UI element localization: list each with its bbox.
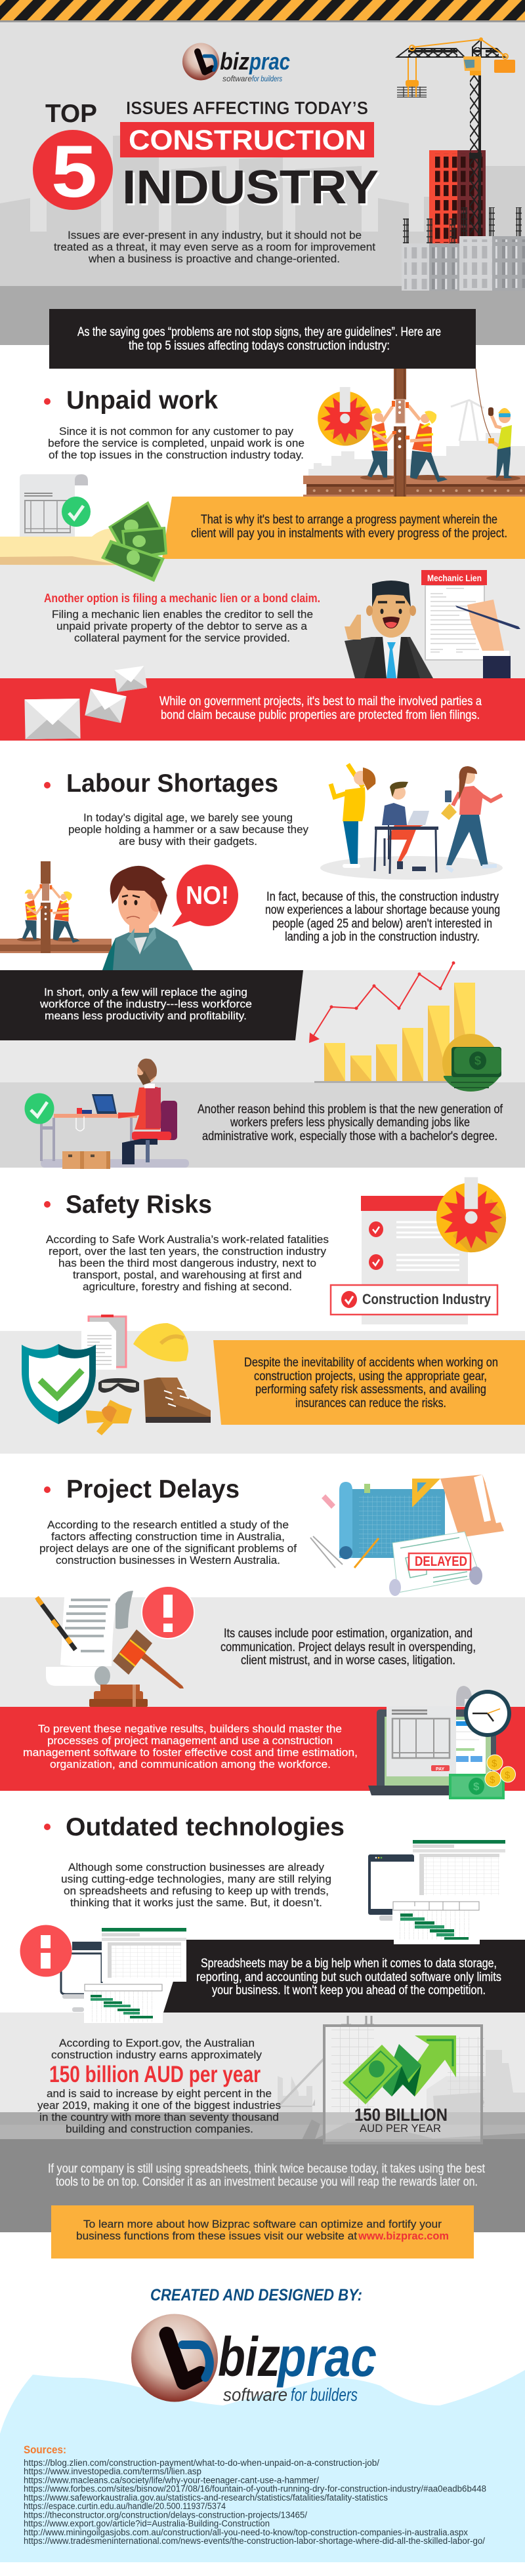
grey panel: causes — [0, 1597, 525, 1707]
panel: export stats background — [0, 2013, 525, 2232]
sources list: https://www.safeworkaustralia.gov.au/statistics-and-research/statistics/fatalities/fatality-statistics — [24, 2493, 388, 2503]
callout: 150 billion graphic: 150 BILLION — [354, 2105, 448, 2125]
header panel background — [0, 20, 525, 345]
chart: declining bar chart with money: $ — [474, 1054, 481, 1067]
logo: bizprac header: biz — [220, 48, 249, 75]
text: export.gov statistic — [37, 2037, 281, 2135]
text: labour shortages intro: people holding a hammer or a saw because they — [68, 824, 309, 836]
text: export.gov statistic: year 2019, making it one of the biggest industries — [37, 2100, 281, 2112]
text: export.gov statistic: building and construction companies. — [66, 2123, 253, 2135]
text: safety risks intro: transport, postal, and warehousing at first and — [73, 1269, 302, 1281]
red callout: bond claim — [0, 678, 525, 741]
sources list: https://www.forbes.com/sites/bisnow/2017/08/16/fountain-of-youth-running-dry-for-construction-industry/#aa0eadb6b448 — [24, 2484, 486, 2494]
intro paragraph: when a business is proactive and change-oriented. — [88, 253, 340, 265]
red callout: project management software: processes of project management and use a construction — [47, 1735, 333, 1747]
dark callout: spreadsheets limit business — [163, 1940, 525, 2013]
illustration: checklist with construction industry — [331, 1196, 497, 1324]
callout: 150 billion graphic: AUD PER YEAR — [360, 2122, 441, 2135]
illustration: laptop, clock and cash: $ — [492, 1758, 497, 1769]
text: safety risks intro: According to Safe Work Australia’s work-related fatalities — [46, 1234, 329, 1246]
heading: labour shortages: Labour Shortages — [66, 769, 278, 798]
icon: warning badge — [318, 387, 372, 446]
sources list: Sources: — [24, 2443, 66, 2456]
illustration: workers beside young man — [0, 861, 193, 970]
sources list: https://espace.curtin.edu.au/handle/20.500.11937/5374 — [24, 2501, 226, 2511]
intro paragraph: treated as a threat, it may even serve as a room for improvement — [54, 241, 375, 253]
text: labour shortage explanation — [265, 889, 500, 944]
text: project delays intro: project delays are one of the significant problems of — [39, 1543, 297, 1555]
illustration: safety gear — [22, 1315, 211, 1435]
speech bubble: no — [172, 865, 238, 927]
panel: admin work — [0, 1082, 525, 1168]
orange callout: reduce the risks: construction projects, using the appropriate gear, — [254, 1369, 487, 1383]
title: INDUSTRY — [124, 163, 381, 216]
title: CONSTRUCTION — [129, 125, 366, 156]
orange callout: reduce the risks — [213, 1340, 525, 1425]
logo: bizprac footer: for builders — [291, 2384, 358, 2405]
grey panel: mechanic lien — [0, 559, 525, 678]
sources list: https://www.export.gov/article?id=Australia-Building-Construction — [24, 2519, 270, 2528]
illustration: spreadsheet, monitor and gantt right — [368, 1840, 505, 1945]
text: safety risks intro: report, over the last ten years, the construction industry — [49, 1246, 327, 1257]
quote banner: As the saying goes “problems are not stop signs, they are guidelines”. Here are — [77, 325, 441, 339]
intro paragraph: Issues are ever-present in any industry, but it should not be — [68, 230, 362, 241]
text: safety risks intro: agriculture, forestry and fishing at second. — [83, 1281, 292, 1293]
illustration: tower crane and buildings — [397, 37, 525, 291]
text: unpaid work intro: Since it is not common for any customer to pay — [59, 426, 294, 438]
heading: unpaid work: Unpaid work — [66, 386, 218, 415]
call to action box: www.bizprac.com — [358, 2230, 449, 2242]
title: 5 — [51, 131, 97, 213]
icon: envelopes — [24, 666, 147, 739]
text: export.gov statistic: 150 billion AUD per year — [49, 2062, 261, 2087]
red callout: project management software: organization, and communication among the workforce. — [50, 1759, 331, 1770]
heading: project delays: Project Delays — [66, 1475, 240, 1503]
call to action box: business functions from these issues visit our website at — [76, 2230, 357, 2242]
text: unpaid work intro: of the top issues in the construction industry today. — [49, 449, 304, 461]
text: mechanic lien: collateral payment for the service provided. — [74, 632, 290, 644]
illustration: laptop, clock and cash — [368, 1686, 516, 1799]
red callout: project management software: management software to foster effective cost and time estimation, — [23, 1747, 358, 1759]
text: project delays intro — [39, 1519, 297, 1566]
orange callout: reduce the risks: insurances can reduce the risks. — [295, 1396, 446, 1410]
red callout: project management software: To prevent these negative results, builders should master the — [38, 1723, 342, 1735]
hazard stripe banner — [0, 0, 525, 22]
text: project delays intro: factors affecting construction time in Australia, — [51, 1531, 285, 1543]
text: think twice — [48, 2161, 485, 2189]
footer wave panel — [0, 2370, 525, 2562]
illustration: contract, pen, gavel and alert — [37, 1585, 195, 1707]
call to action box — [51, 2205, 474, 2259]
text: safety risks intro — [46, 1234, 329, 1293]
text: project delays intro: According to the research entitled a study of the — [47, 1519, 289, 1531]
text: labour shortages intro — [68, 812, 309, 848]
orange callout: reduce the risks: performing safety risk assessments, and availing — [255, 1382, 486, 1397]
text: mechanic lien — [44, 592, 320, 644]
text: unpaid work intro: before the service is completed, unpaid work is one — [48, 438, 304, 449]
illustration: blueprints and delayed stamp — [310, 1475, 504, 1596]
sources list: http://www.miningoilgasjobs.com.au/construction/all-you-need-to-know/top-construction-companies-in-australia.aspx — [24, 2527, 468, 2537]
text: less physical jobs: workers prefers less physically demanding jobs like — [230, 1115, 470, 1130]
illustration: laptop, clock and cash: PAY — [436, 1767, 445, 1772]
grey panel: safety — [0, 1331, 525, 1454]
text: outdated technologies intro: on spreadsheets and refusing to keep up with trends, — [64, 1885, 329, 1897]
sources list: https://theconstructor.org/construction/delays-construction-projects/13465/ — [24, 2510, 307, 2520]
logo: bizprac header: software — [222, 74, 252, 83]
sources list: https://www.macleans.ca/society/life/why-your-teenager-cant-use-a-hammer/ — [24, 2476, 319, 2485]
dark callout: aging workforce — [0, 970, 303, 1040]
text: project delays intro: construction businesses in Western Australia. — [56, 1555, 280, 1566]
illustration: laptop, clock and cash: $ — [473, 1780, 480, 1793]
dark callout: aging workforce: means less productivity and profitability. — [45, 1010, 247, 1022]
heading: outdated technologies: Outdated technologies — [66, 1813, 345, 1841]
illustration: laptop, clock and cash: $ — [490, 1774, 495, 1786]
text: outdated technologies intro — [61, 1862, 331, 1909]
sources list: https://blog.zlien.com/construction-payment/what-to-do-when-unpaid-on-a-construction-job/ — [24, 2458, 379, 2468]
illustration: young people with gadgets — [320, 764, 503, 880]
logo: bizprac footer: software — [223, 2384, 287, 2405]
text: outdated technologies intro: thinking that it works just the same. But, it doesn’t. — [70, 1897, 322, 1909]
text: labour shortage explanation: landing a job in the construction industry. — [285, 930, 480, 944]
dark callout: aging workforce: workforce of the industry---less workforce — [39, 998, 252, 1010]
text: causes of delays: client mistrust, and in worse cases, litigation. — [241, 1653, 455, 1667]
logo: bizprac header: for builders — [252, 74, 282, 83]
text: causes of delays — [220, 1626, 476, 1667]
text: mechanic lien: unpaid private property of the debtor to serve as a — [56, 621, 308, 632]
illustration: checklist with construction industry: Construction Industry — [362, 1291, 492, 1307]
quote banner — [49, 309, 476, 369]
icon: warning badge large — [436, 1177, 506, 1252]
sources list — [24, 2443, 486, 2546]
text: outdated technologies intro: Although some construction businesses are already — [68, 1862, 325, 1873]
illustration: office worker at desk — [25, 1059, 189, 1169]
text: less physical jobs — [198, 1102, 503, 1143]
logo: bizprac header: prac — [249, 48, 290, 75]
text: export.gov statistic: and is said to increase by eight percent in the — [47, 2088, 272, 2100]
illustration: invoice, hand and money — [0, 474, 167, 582]
text: unpaid work intro — [48, 426, 304, 461]
title: ISSUES AFFECTING TODAY’S — [126, 98, 368, 118]
illustration: blueprints and delayed stamp: DELAYED — [415, 1554, 467, 1569]
text: export.gov statistic: in the country with more than seventy thousand — [39, 2112, 279, 2123]
logo: bizprac header — [182, 43, 290, 83]
text: export.gov statistic: According to Export.gov, the Australian — [59, 2037, 255, 2049]
intro paragraph — [54, 230, 375, 265]
chart: declining bar chart with money — [309, 962, 501, 1092]
red callout: project management software — [0, 1707, 525, 1791]
text: causes of delays: communication. Project delays result in overspending, — [220, 1640, 476, 1654]
logo: bizprac footer: biz — [218, 2326, 280, 2388]
illustration: invoice, hand and money: PAY — [59, 539, 66, 543]
text: mechanic lien: Another option is filing a mechanic lien or a bond claim. — [44, 592, 320, 605]
illustration: laptop, clock and cash: $ — [505, 1770, 511, 1781]
text: export.gov statistic: construction industry earns approximately — [51, 2049, 262, 2061]
heading: created and designed by: CREATED AND DESIGNED BY: — [150, 2286, 362, 2304]
illustration: spreadsheet, monitor, gantt and alert left — [20, 1925, 186, 2023]
sources list: https://www.tradesmeninternational.com/news-events/the-construction-labor-shortage-where-did-all-the-skilled-labor-go/ — [24, 2536, 485, 2546]
title: INDUSTRY — [122, 161, 379, 214]
quote banner: the top 5 issues affecting todays construction industry: — [129, 338, 390, 353]
text: outdated technologies intro: using cutting-edge technologies, many are still relying — [61, 1873, 331, 1885]
logo: bizprac footer — [131, 2314, 377, 2405]
illustration: workers on steel beam — [303, 369, 525, 497]
text: mechanic lien: Filing a mechanic lien enables the creditor to sell the — [52, 609, 313, 621]
callout: 150 billion graphic — [324, 2016, 482, 2143]
heading: safety risks: Safety Risks — [66, 1191, 212, 1219]
sources list: https://www.investopedia.com/terms/l/lien.asp — [24, 2466, 201, 2476]
dark callout: aging workforce: In short, only a few will replace the aging — [44, 987, 247, 998]
text: safety risks intro: has been the third most dangerous industry, next to — [58, 1257, 316, 1269]
orange callout: progress payment — [162, 497, 525, 559]
illustration: man signing mechanic lien — [345, 570, 520, 678]
call to action box: To learn more about how Bizprac software can optimize and fortify your — [83, 2218, 442, 2230]
text: causes of delays: Its causes include poor estimation, organization, and — [224, 1626, 472, 1641]
title — [33, 98, 381, 216]
text: labour shortages intro: are busy with their gadgets. — [119, 836, 257, 848]
logo: bizprac footer: prac — [276, 2326, 377, 2388]
speech bubble: no: NO! — [186, 882, 229, 910]
grey panel: productivity — [0, 970, 525, 1082]
illustration: man signing mechanic lien: Mechanic Lien — [427, 573, 482, 583]
text: labour shortages intro: In today’s digital age, we barely see young — [83, 812, 293, 824]
title: TOP — [45, 100, 97, 128]
